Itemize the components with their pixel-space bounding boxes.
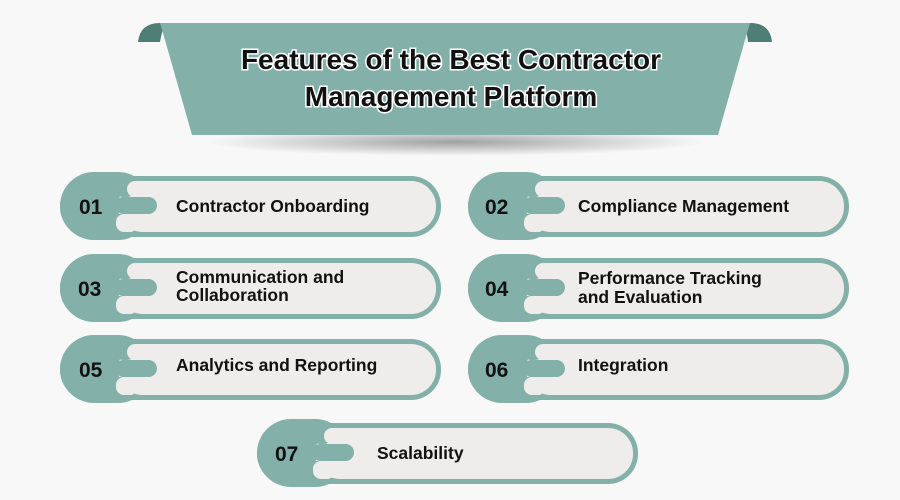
- card 02: 02: [485, 196, 508, 219]
- card 04: and Evaluation: [578, 287, 702, 307]
- title: Management Platform: [305, 81, 597, 112]
- card 05: Analytics and Reporting: [176, 355, 377, 375]
- card 03: [60, 254, 441, 322]
- title: Features of the Best Contractor: [241, 44, 661, 75]
- card 03: Collaboration: [176, 285, 289, 305]
- card 01: [60, 172, 441, 240]
- card 02: [468, 172, 849, 240]
- card 06: 06: [485, 359, 508, 382]
- card 07: 07: [275, 443, 298, 466]
- card 04: [468, 254, 849, 322]
- card 04: Performance Tracking: [578, 268, 762, 288]
- card 03: Communication and: [176, 267, 344, 287]
- card 02: Compliance Management: [578, 196, 789, 216]
- card 01: Contractor Onboarding: [176, 196, 369, 216]
- card 06: [468, 335, 849, 403]
- card 05: [60, 335, 441, 403]
- banner: [138, 23, 772, 156]
- card 03: 03: [78, 278, 101, 301]
- title: [241, 44, 661, 112]
- card 06: Integration: [578, 355, 668, 375]
- card 04: 04: [485, 278, 509, 301]
- card 07: Scalability: [377, 443, 464, 463]
- card 01: 01: [79, 196, 103, 219]
- card 05: 05: [79, 359, 103, 382]
- card 07: [257, 419, 638, 487]
